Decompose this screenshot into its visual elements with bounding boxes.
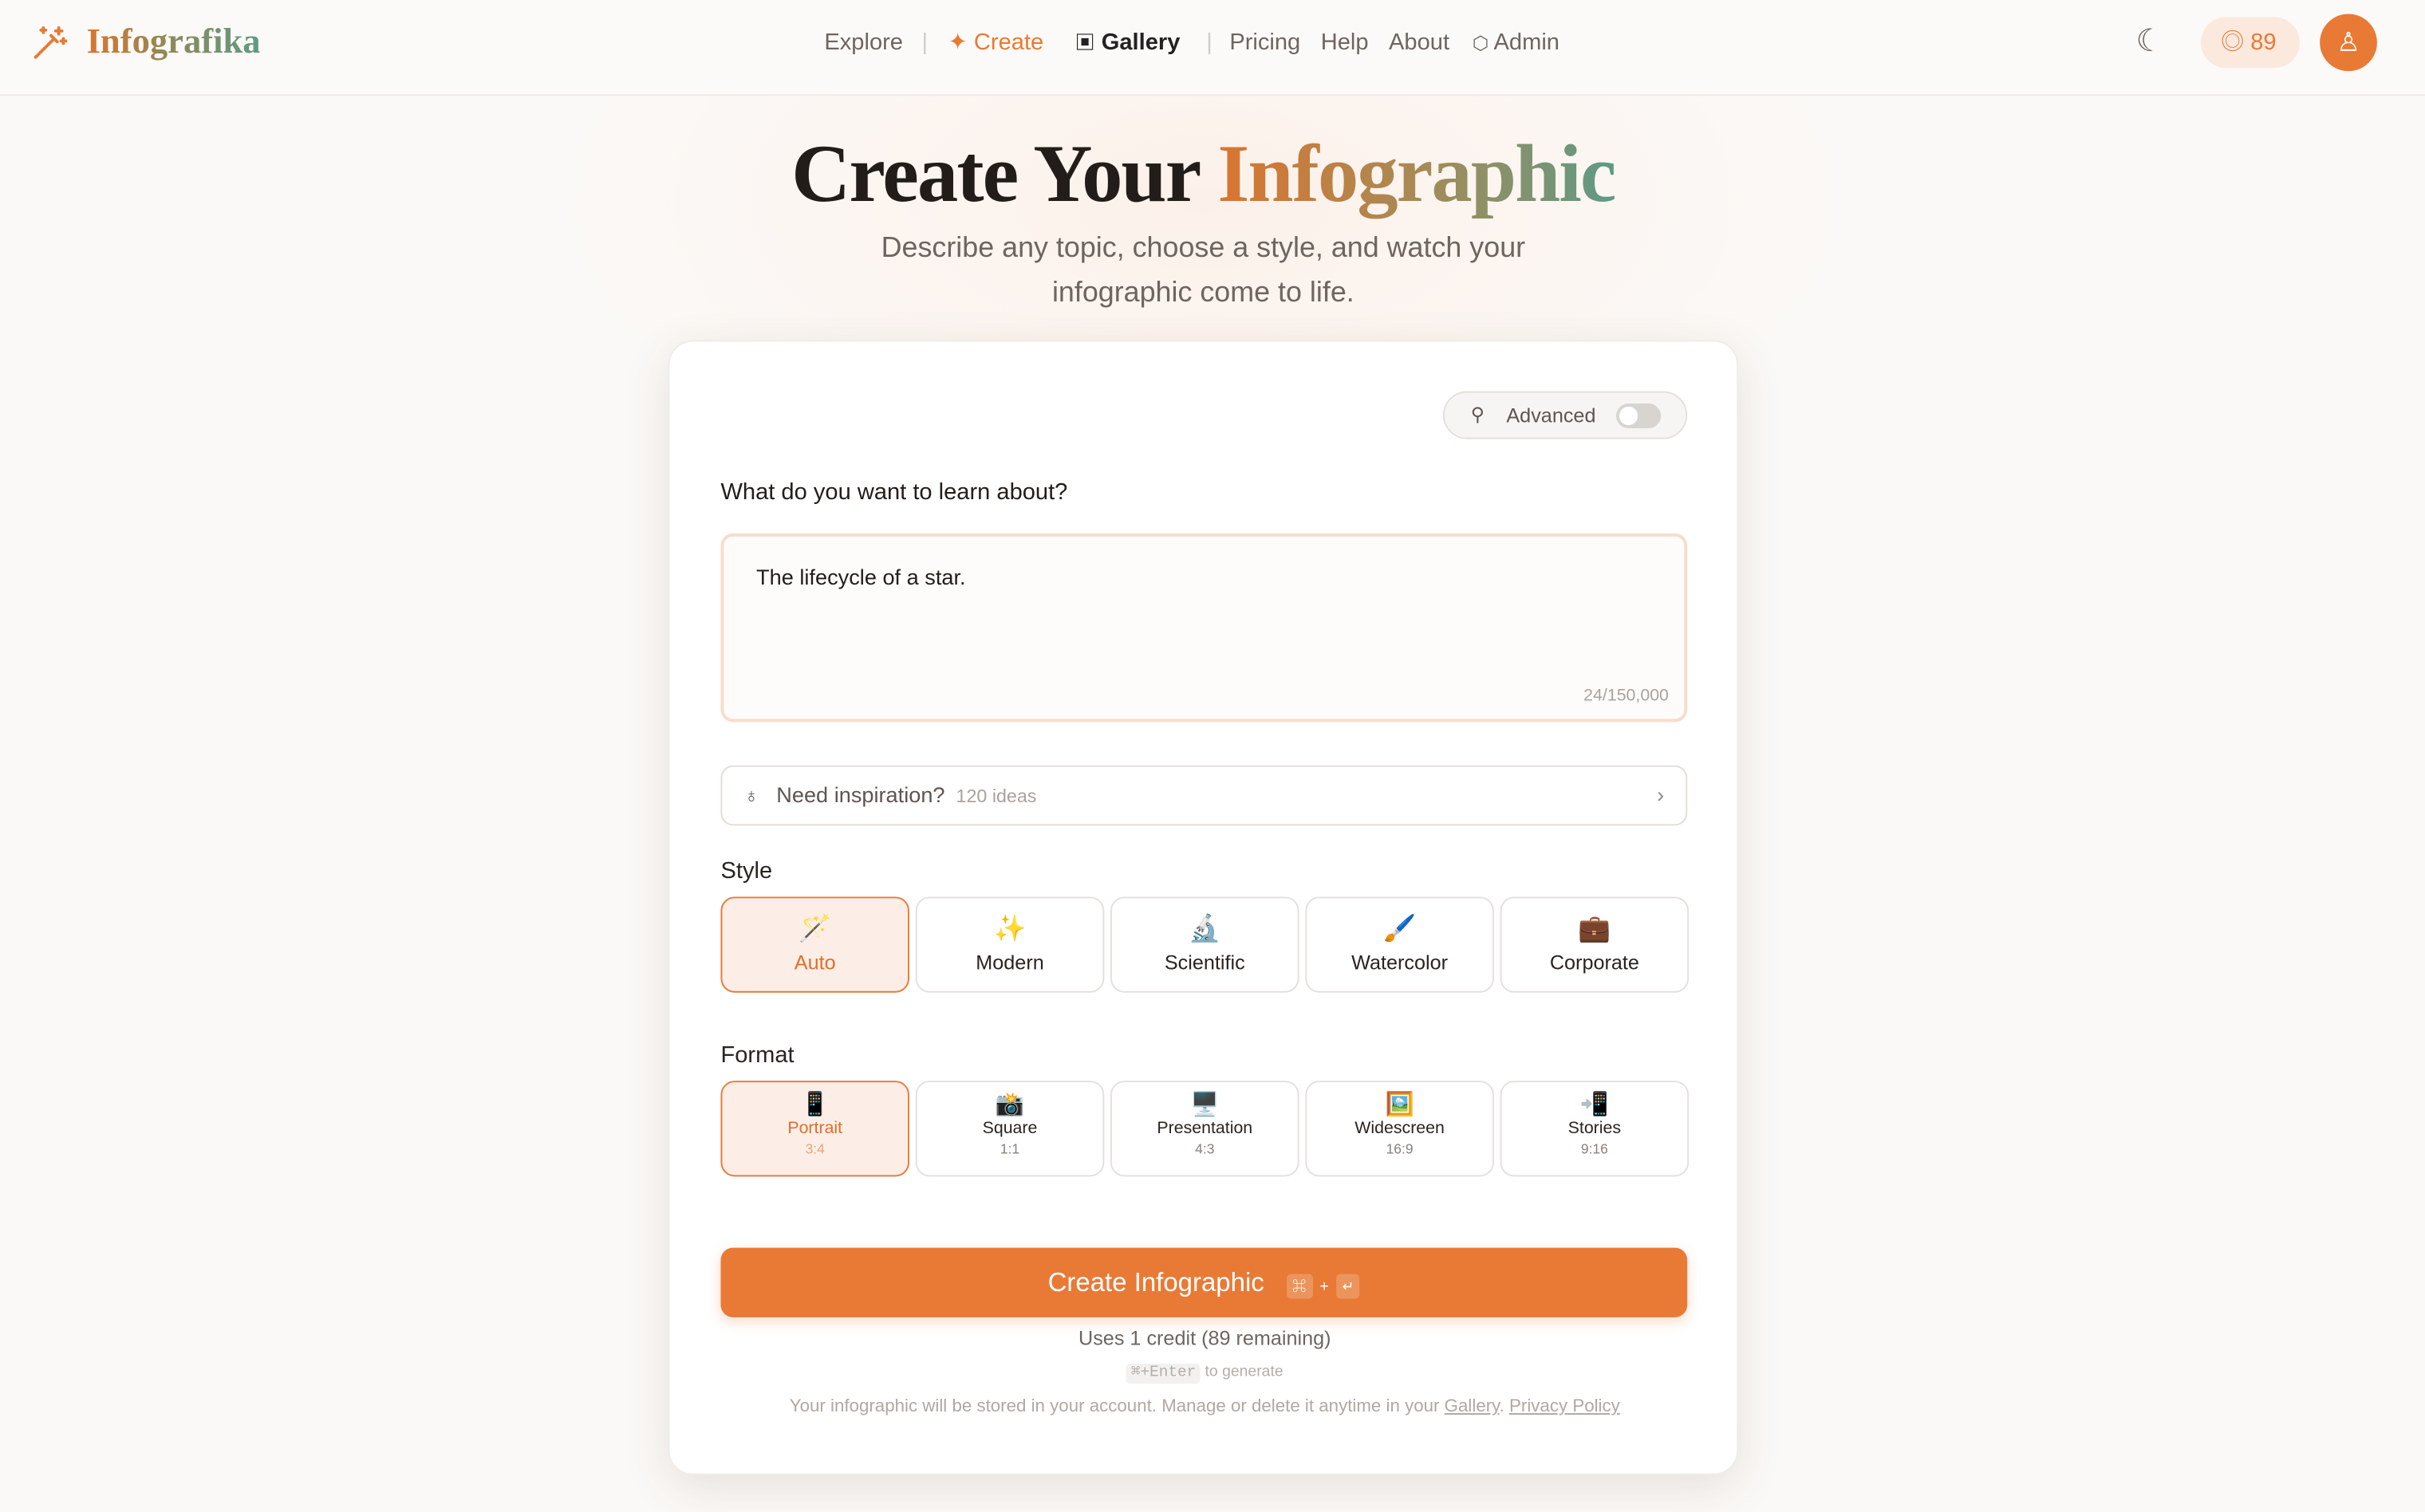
nav links: ▣ Gallery (1074, 30, 1180, 56)
inspiration bar: › (1657, 782, 1664, 807)
inspiration bar: Need inspiration? 120 ideas (776, 782, 1036, 807)
format options: 📲 (1580, 1092, 1609, 1118)
format options (720, 1081, 1690, 1177)
nav links: Pricing (1229, 30, 1300, 56)
shortcut hint: ⌘+Enter to generate (1131, 1364, 1283, 1382)
textarea: The lifecycle of a star. (756, 565, 966, 589)
format label: Format (720, 1042, 795, 1069)
nav links: About (1389, 30, 1449, 56)
format options: Portrait (787, 1120, 842, 1138)
format options: 9:16 (1581, 1141, 1608, 1156)
style label: Style (720, 858, 772, 884)
nav links (824, 30, 1559, 56)
textarea (720, 534, 1687, 722)
format options: Widescreen (1354, 1120, 1445, 1138)
style options: ✨ (993, 914, 1027, 943)
avatar: ♙ (2336, 28, 2360, 57)
advanced toggle (1443, 392, 1687, 439)
style options: Auto (795, 951, 836, 974)
format options: Stories (1568, 1120, 1621, 1138)
format options: 📸 (996, 1092, 1024, 1118)
style options: 🖌️ (1383, 914, 1416, 943)
prompt label: What do you want to learn about? (720, 479, 1067, 506)
format options: 3:4 (806, 1141, 825, 1156)
nav links: | (1206, 30, 1212, 56)
inspiration bar (720, 766, 1687, 825)
nav links: | (922, 30, 928, 56)
header (0, 0, 2425, 96)
title: Create Your Infographic (791, 130, 1615, 219)
nav links: Explore (824, 30, 903, 56)
icon: moon: ☾ (2135, 25, 2163, 59)
panel: form card (668, 341, 1738, 1475)
inspiration bar: ♁ (744, 784, 759, 807)
style options: Corporate (1550, 951, 1639, 974)
format options: 16:9 (1386, 1141, 1414, 1156)
create button: Create Infographic ⌘ + ↵ (1048, 1268, 1354, 1297)
nav links: ✦ Create (948, 30, 1043, 56)
format options: Square (983, 1120, 1037, 1138)
logo text: Infografika (87, 22, 261, 61)
nav links: ⬡ Admin (1473, 30, 1559, 56)
nav links: Help (1321, 30, 1369, 56)
credits pill (2201, 17, 2300, 68)
create button (720, 1248, 1687, 1317)
format options: 🖼️ (1385, 1092, 1414, 1118)
style options: Scientific (1165, 951, 1245, 974)
privacy note: Your infographic will be stored in your account. Manage or delete it anytime in your Gallery. Privacy Policy (790, 1398, 1620, 1416)
advanced toggle: ⚲ (1471, 404, 1485, 425)
style options: Watercolor (1351, 951, 1448, 974)
textarea: 24/150,000 (1583, 687, 1669, 705)
avatar (2320, 14, 2377, 71)
style options: 🪄 (798, 914, 831, 943)
style options (720, 896, 1690, 993)
credits pill: ◎ 89 (2221, 30, 2277, 56)
format options: 4:3 (1195, 1141, 1214, 1156)
format options: 1:1 (1000, 1141, 1019, 1156)
style options: 💼 (1578, 914, 1611, 943)
format options: 📱 (801, 1092, 830, 1118)
credit note: Uses 1 credit (89 remaining) (1078, 1326, 1331, 1350)
format options: Presentation (1157, 1120, 1252, 1138)
subtitle: Describe any topic, choose a style, and watch your infographic come to life. (881, 230, 1525, 308)
format options: 🖥️ (1190, 1092, 1219, 1118)
icon: magic wand logo (34, 26, 67, 59)
style options: Modern (976, 951, 1044, 974)
advanced toggle: Advanced (1506, 404, 1595, 427)
style options: 🔬 (1189, 914, 1221, 943)
